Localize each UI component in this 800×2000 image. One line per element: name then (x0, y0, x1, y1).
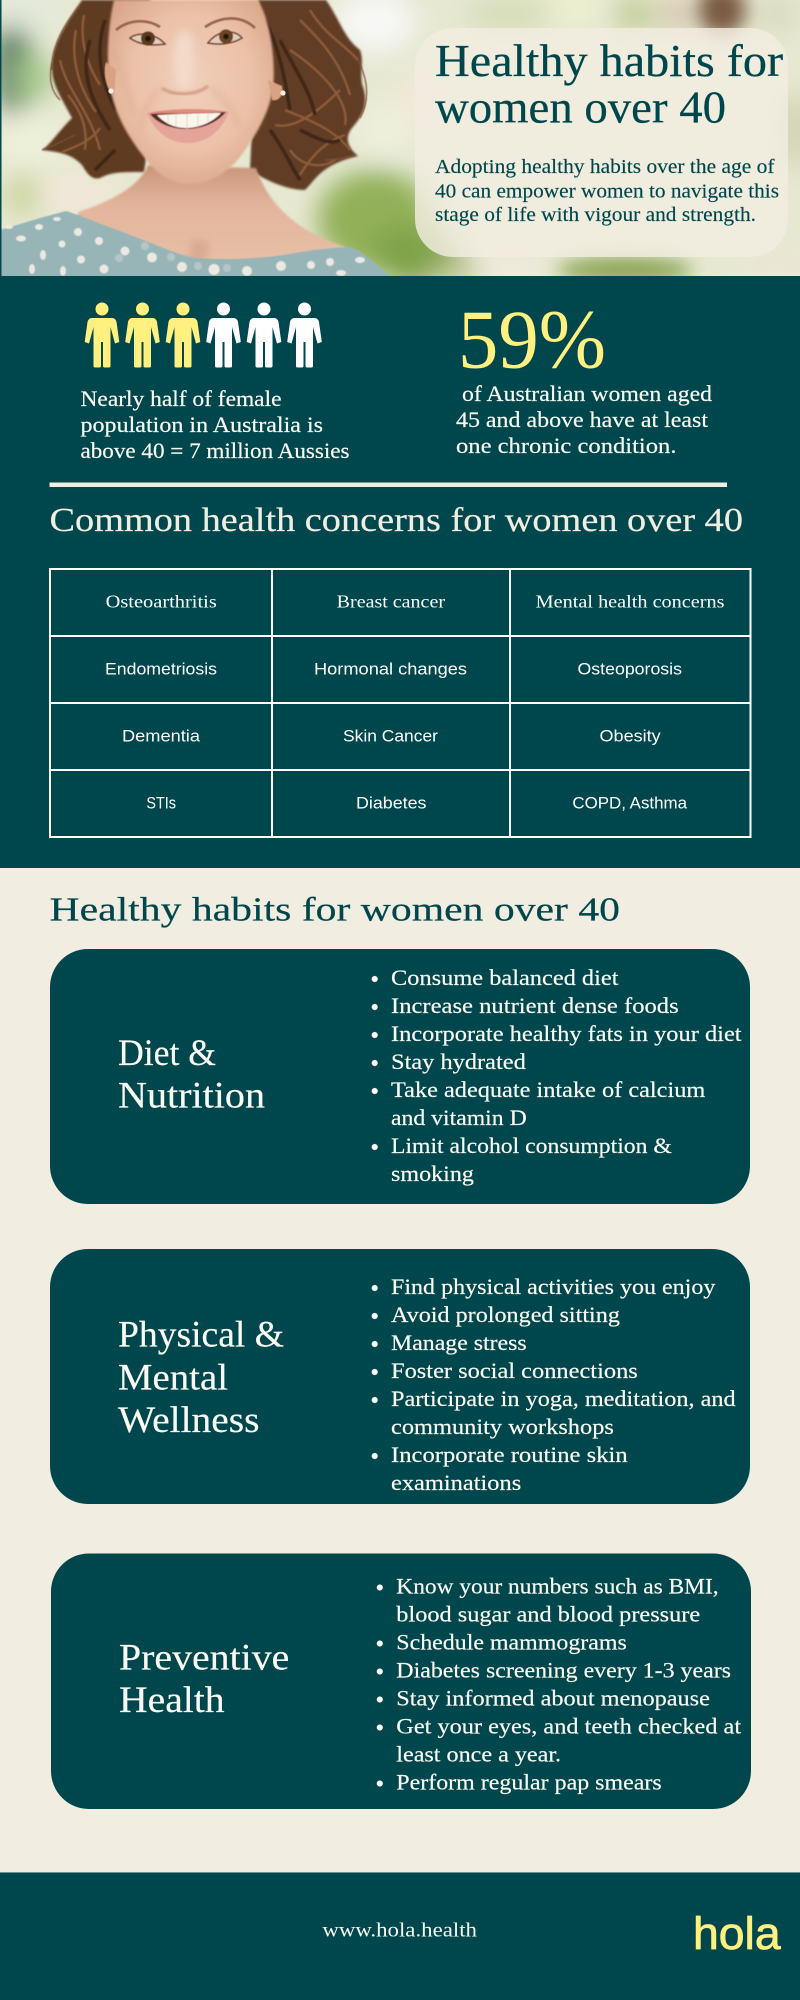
logo: hola: hola (693, 1908, 782, 1959)
table row 4 (146, 794, 688, 813)
bullet list: least once a year. (396, 1742, 561, 1766)
bullet list: and vitamin D (391, 1105, 527, 1130)
table row 2: Hormonal changes (314, 660, 467, 679)
stat text: population (80, 386, 350, 463)
bullet list: Stay informed about menopause (396, 1686, 710, 1710)
bullet list (372, 1274, 736, 1495)
bullet list: Consume balanced diet (391, 965, 618, 990)
smile (147, 109, 229, 143)
card heading: Mental (118, 1357, 228, 1398)
footer band (0, 1872, 800, 2000)
table row 1: Breast cancer (337, 592, 445, 612)
stat text: population: above 40 = 7 million Aussies (80, 438, 350, 463)
table row 1 (106, 592, 725, 612)
bullet list: Incorporate routine skin (391, 1442, 628, 1467)
frosted panel background (415, 28, 788, 257)
card heading (118, 1314, 284, 1440)
card heading: Physical & (118, 1314, 284, 1355)
heading: common health concerns: Common health concerns for women over 40 (50, 502, 743, 539)
bullet list: Foster social connections (391, 1358, 638, 1383)
bullet list: Find physical activities you enjoy (391, 1274, 715, 1299)
table row 2: Endometriosis (105, 660, 217, 679)
bullet list (372, 965, 742, 1186)
bullet list: community workshops (391, 1414, 614, 1439)
card heading: Diet & (118, 1032, 216, 1073)
stat text: chronic condition: one chronic condition. (456, 433, 676, 458)
bullet list: Incorporate healthy fats in your diet (391, 1021, 742, 1046)
title: women over 40 (435, 82, 726, 132)
bullet list: Stay hydrated (391, 1049, 526, 1074)
stat number: 59%: 59% (458, 294, 606, 386)
table row 1: Osteoarthritis (106, 592, 217, 612)
bullet list: Manage stress (391, 1330, 527, 1355)
intro paragraph (435, 156, 779, 226)
website: www.hola.health (322, 1920, 477, 1942)
card heading: Wellness (118, 1399, 260, 1440)
panel: diet and nutrition (50, 949, 750, 1204)
bullet list: Know your numbers such as BMI, (396, 1574, 719, 1598)
bullet list: examinations (391, 1470, 521, 1495)
face shading and wrinkles (148, 30, 230, 108)
card heading: Preventive (119, 1636, 289, 1677)
bullet list: Avoid prolonged sitting (391, 1302, 620, 1327)
ears and earrings (105, 62, 282, 100)
face details (116, 18, 255, 46)
table row 2 (105, 660, 682, 679)
hero photo: smiling woman in polka-dot blouse (0, 0, 800, 285)
table row 3: Dementia (122, 727, 201, 746)
table row 2: Osteoporosis (578, 660, 682, 679)
table row 3: Skin Cancer (343, 727, 438, 746)
table row 4: COPD, Asthma (572, 794, 688, 813)
title (435, 35, 783, 132)
hair strands (42, 5, 367, 180)
card heading (118, 1032, 265, 1116)
stat text: population: population in Australia is (80, 412, 323, 437)
card heading: Nutrition (118, 1075, 265, 1116)
bullet list: blood sugar and blood pressure (396, 1602, 700, 1626)
stat text: chronic condition: of Australian women aged (462, 381, 712, 406)
blouse (0, 211, 392, 277)
bullet list: Schedule mammograms (396, 1630, 627, 1654)
face (108, 0, 274, 184)
bullet list: Get your eyes, and teeth checked at (396, 1714, 741, 1738)
title: Healthy habits for (435, 35, 783, 86)
table row 3 (122, 727, 661, 746)
hair back (42, 0, 365, 190)
hero title panel (415, 28, 788, 257)
table row 1: Mental health concerns (536, 592, 724, 612)
bullet list: Participate in yoga, meditation, and (391, 1386, 736, 1411)
table row 4: STIs (146, 794, 176, 813)
icon: six people, three highlighted (85, 302, 322, 368)
intro paragraph: stage of life with vigour and strength. (435, 204, 756, 226)
stat text: chronic condition (456, 381, 712, 458)
polka dots (5, 217, 365, 276)
panel: preventive health (51, 1554, 751, 1809)
card heading (119, 1636, 289, 1720)
stat text: chronic condition: 45 and above have at least (456, 407, 708, 432)
table row 3: Obesity (600, 727, 661, 746)
heading: healthy habits: Healthy habits for women over 40 (50, 892, 620, 929)
intro paragraph: 40 can empower women to navigate this (435, 180, 779, 202)
bullet list: smoking (391, 1161, 474, 1186)
table: health concerns (50, 569, 750, 837)
bullet list (377, 1574, 741, 1794)
bullet list: Limit alcohol consumption & (391, 1133, 672, 1158)
bullet list: Take adequate intake of calcium (391, 1077, 705, 1102)
bullet list: Diabetes screening every 1-3 years (396, 1658, 731, 1682)
stat text: population: Nearly half of female (80, 386, 282, 411)
bullet list: Perform regular pap smears (396, 1770, 662, 1794)
dark statistics section background (0, 276, 800, 868)
card heading: Health (119, 1679, 225, 1720)
neck and chest (76, 164, 346, 260)
table row 4: Diabetes (356, 794, 426, 813)
intro paragraph: Adopting healthy habits over the age of (435, 156, 775, 178)
panel: physical and mental wellness (50, 1249, 750, 1504)
bullet list: Increase nutrient dense foods (391, 993, 679, 1018)
